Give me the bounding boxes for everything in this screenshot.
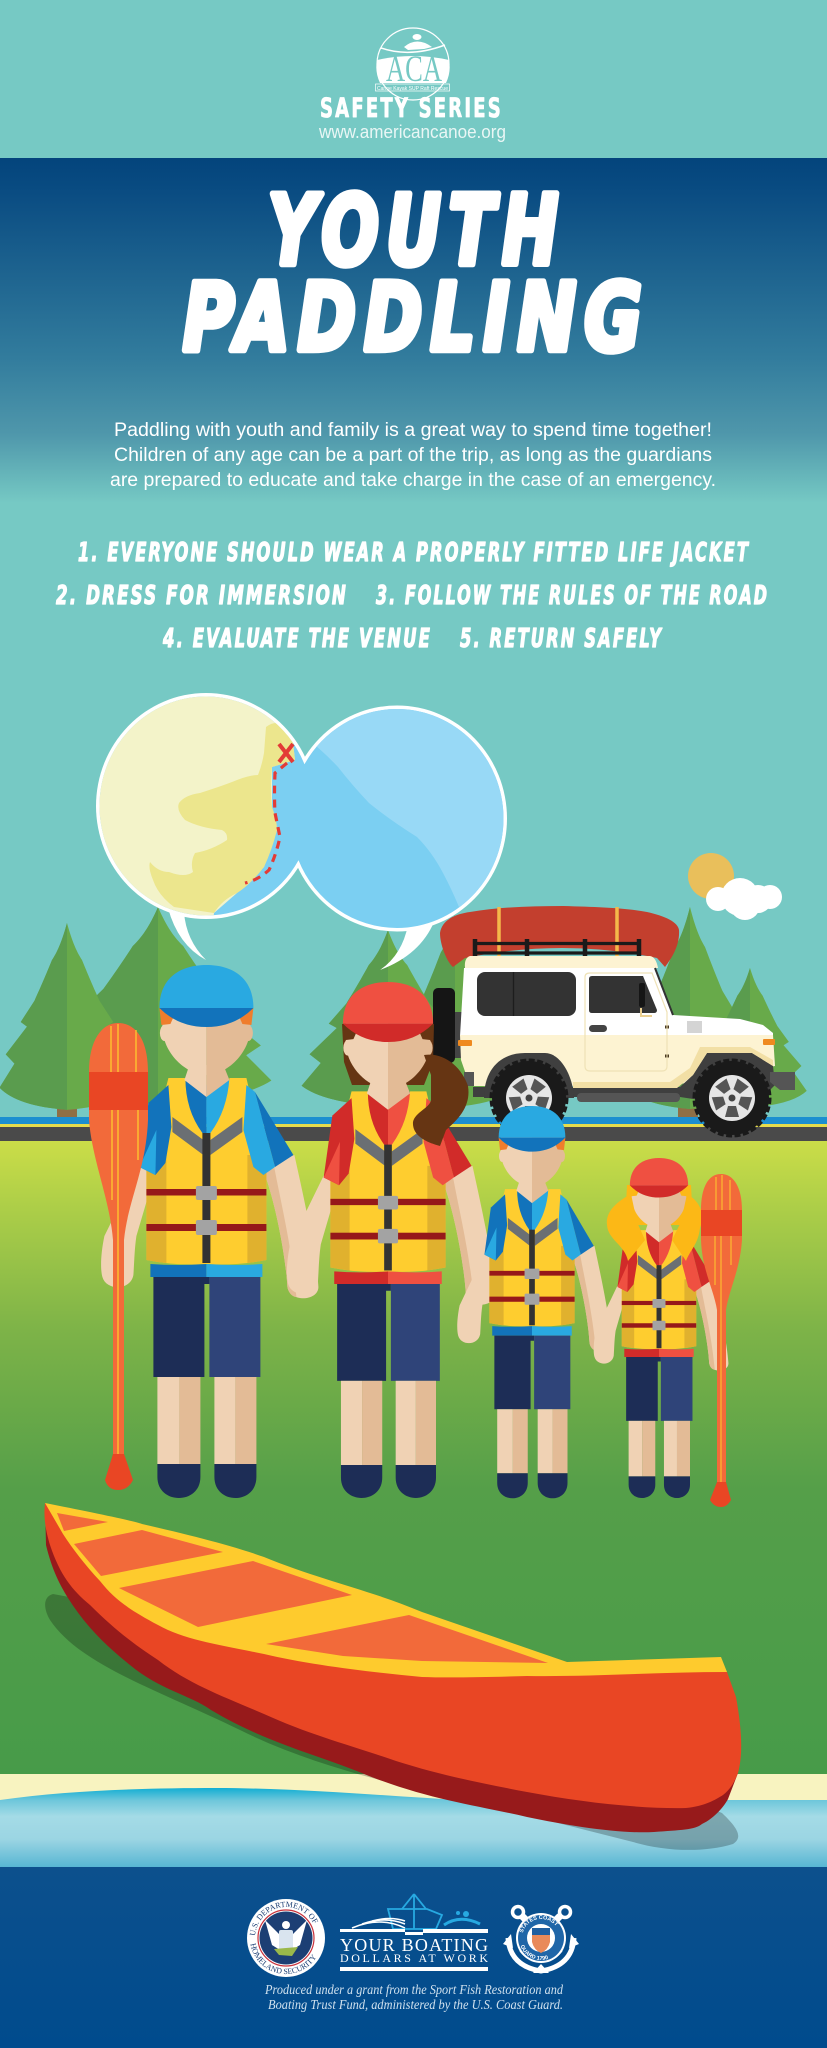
logo: your boating dollars at work: DOLLARS AT WORK: [340, 1951, 488, 1965]
panel: title gradient: [0, 158, 827, 503]
canoe panels: [57, 1513, 548, 1663]
title: YOUTH: [268, 175, 566, 287]
intro paragraph: Paddling with youth and family is a great way to spend time together!: [114, 420, 712, 441]
icon: coast guard emblem: STATES COAST: [520, 1915, 559, 1932]
icon: right paddle: [701, 1174, 742, 1507]
ponytail: [413, 1055, 468, 1146]
intro paragraph: Children of any age can be a part of the trip, as long as the guardians: [114, 445, 712, 466]
icon: coast guard emblem: [503, 1904, 579, 1974]
sand: [0, 1774, 827, 1814]
safety list: [56, 538, 769, 654]
safety list: 5. RETURN SAFELY: [460, 624, 663, 654]
map route: [245, 763, 287, 883]
icon: ACA logo: Canoe Kayak SUP Raft Rescue: [377, 86, 448, 92]
canoe hull shade: [45, 1503, 738, 1832]
canoe rim: [45, 1503, 727, 1677]
icon: cloud: [706, 878, 782, 920]
person: son: [457, 1106, 612, 1498]
safety list: 4. EVALUATE THE VENUE: [162, 624, 432, 654]
rack and straps: [499, 907, 617, 956]
logo: your boating dollars at work: YOUR BOATING: [340, 1935, 488, 1955]
map water: [100, 696, 504, 928]
title: [183, 175, 650, 373]
icon: left paddle: [89, 1023, 148, 1490]
jeep body: [460, 968, 773, 1036]
heading: safety series: SAFETY SERIES: [320, 93, 503, 124]
grass: [0, 1141, 827, 1774]
safety list: 2. DRESS FOR IMMERSION: [56, 581, 348, 611]
icon: sun: [688, 853, 734, 899]
website: www.americancanoe.org: [318, 122, 506, 142]
map land: [100, 696, 295, 916]
trees: [0, 907, 807, 1123]
icon: ACA logo: [376, 28, 450, 100]
icon: DHS seal: [247, 1899, 325, 1977]
pigtails: [607, 1194, 702, 1261]
person: mother: [287, 982, 496, 1498]
canoe hull: [44, 1503, 741, 1808]
logo: your boating dollars at work: [340, 1894, 488, 1971]
intro paragraph: [110, 420, 716, 491]
panel: speech bubbles with map: [90, 680, 520, 970]
panel: footer: [0, 1867, 827, 2048]
person: daughter: [594, 1158, 728, 1498]
icon: ACA logo: ACA: [386, 49, 442, 90]
footer credit: [264, 1982, 563, 2012]
canoe: [44, 1503, 741, 1850]
wheels: [492, 1061, 566, 1135]
header: ACA logo and safety series: [318, 28, 506, 142]
shoreline and road: [0, 1117, 827, 1141]
water: [0, 1788, 827, 1867]
icon: DHS seal: U.S. DEPARTMENT OF: [250, 1902, 318, 1935]
intro paragraph: are prepared to educate and take charge in the case of an emergency.: [110, 470, 716, 491]
footer credit: Produced under a grant from the Sport Fish Restoration and: [264, 1982, 563, 1997]
jeep with canoe: [433, 906, 795, 1136]
person: father: [101, 965, 318, 1498]
title: PADDLING: [183, 264, 650, 373]
spare wheel: [455, 1012, 464, 1058]
roof canoe: [440, 906, 679, 967]
icon: coast guard emblem: GUARD 1790: [521, 1945, 548, 1960]
icon: DHS seal: HOMELAND SECURITY: [250, 1943, 316, 1974]
canoe shadow: [45, 1594, 738, 1850]
footer credit: Boating Trust Fund, administered by the U.S. Coast Guard.: [268, 1997, 563, 2012]
